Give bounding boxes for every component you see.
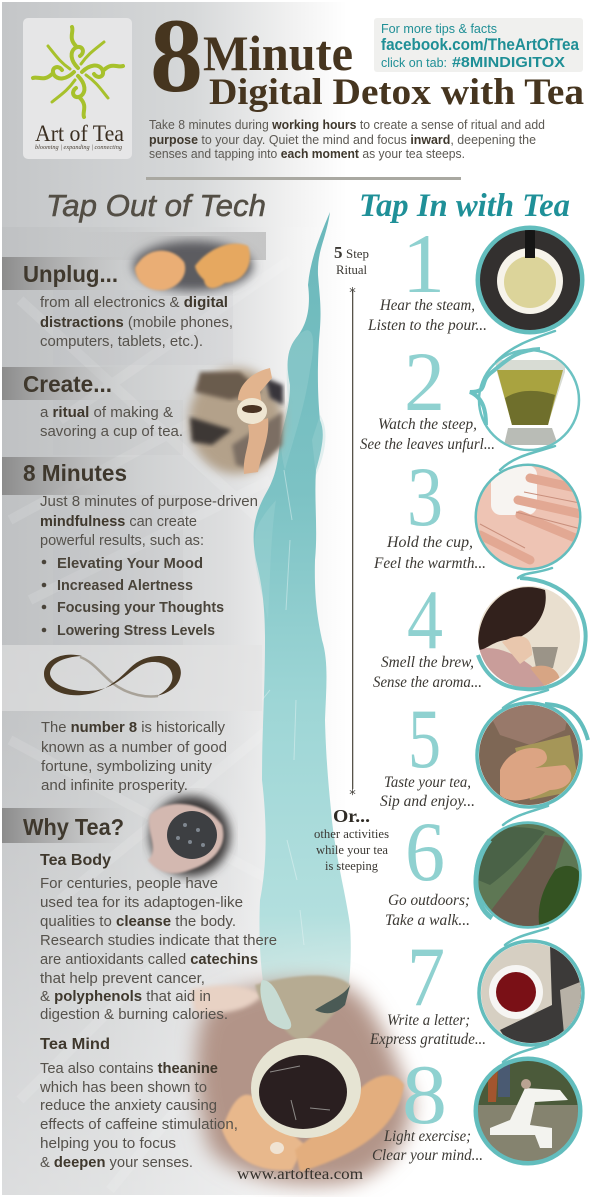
step 8: 8 — [402, 1048, 447, 1142]
step 7: 7 — [407, 930, 445, 1024]
step 7: Write a letter; — [387, 1012, 470, 1029]
subsection: tea mind: which has been shown to — [39, 1079, 207, 1096]
step 4: 4 — [407, 573, 443, 667]
step 6 — [386, 821, 582, 929]
band: unplug — [2, 257, 132, 290]
section: 8 minutes: Just 8 minutes of purpose-driven — [40, 493, 258, 510]
step 1: 1 — [402, 217, 445, 311]
section: unplug: from all electronics & digital — [40, 294, 228, 311]
heading: tap in with tea: Tap In with Tea — [359, 188, 570, 224]
contact callout: #8MINDIGITOX — [452, 54, 565, 71]
band: 8 minutes — [2, 457, 142, 495]
contact callout — [374, 18, 583, 72]
subsection: tea mind: effects of caffeine stimulation, — [40, 1116, 238, 1133]
photo: tai chi — [475, 1058, 581, 1165]
logo tagline: blooming | expanding | connecting — [35, 144, 123, 151]
step 3: 3 — [407, 450, 443, 544]
section: why tea: Why Tea? — [23, 814, 124, 840]
title: Digital Detox with Tea — [209, 72, 584, 113]
step 6: Take a walk... — [385, 912, 470, 929]
intro text: Take 8 minutes during working hours to create a sense of ritual and add — [149, 118, 545, 132]
section: create: Create... — [23, 371, 112, 397]
section: why tea — [23, 814, 277, 968]
heading: tap out of tech: Tap Out of Tech — [46, 188, 266, 223]
text continuation: tea body: & polyphenols that aid in — [40, 988, 211, 1005]
step 5 — [380, 692, 588, 810]
band: why tea — [2, 808, 127, 843]
text: number 8: and infinite prosperity. — [41, 777, 188, 794]
bullet list: Elevating Your Mood — [57, 555, 203, 572]
text continuation: tea body: digestion & burning calories. — [40, 1006, 228, 1023]
section: create: savoring a cup of tea. — [40, 423, 183, 440]
or other activities note: while your tea — [316, 842, 388, 857]
title: Minute — [203, 25, 353, 81]
step 3 — [374, 464, 582, 570]
intro text: senses and tapping into each moment as your tea steeps. — [149, 147, 465, 161]
text continuation: tea body: that help prevent cancer, — [40, 970, 205, 987]
website url: www.artoftea.com — [237, 1166, 363, 1183]
section: unplug: computers, tablets, etc.). — [40, 333, 203, 350]
text: number 8: known as a number of good — [41, 739, 227, 756]
subsection: tea mind: Tea also contains theanine — [40, 1060, 218, 1077]
section: create — [23, 371, 183, 440]
teal ribbon — [254, 212, 351, 1010]
text: number 8 — [41, 719, 227, 794]
intro text: purpose to your day. Quiet the mind and focus inward, deepening the — [149, 133, 536, 147]
subsection: tea mind: Tea Mind — [40, 1036, 110, 1053]
step 2: Watch the steep, — [378, 416, 477, 433]
subsection: tea body: qualities to cleanse the body. — [40, 913, 236, 930]
step 8: Light exercise; — [383, 1128, 471, 1145]
text continuation: tea body — [40, 970, 228, 1023]
step 3: Feel the warmth... — [373, 555, 486, 572]
step 6: Go outdoors; — [388, 892, 470, 909]
step 1: Hear the steam, — [379, 297, 475, 314]
or other activities note: is steeping — [325, 858, 378, 873]
subsection: tea body: are antioxidants called catechins — [40, 951, 258, 968]
photo: unplugging hands — [133, 241, 253, 291]
bullet list — [42, 555, 224, 639]
step 1 — [367, 217, 585, 335]
contact callout: facebook.com/TheArtOfTea — [381, 35, 579, 54]
divider — [146, 177, 461, 180]
contact callout: For more tips & facts — [381, 21, 497, 36]
bullet list: Lowering Stress Levels — [57, 622, 215, 639]
step 5: 5 — [408, 692, 441, 786]
photo: cup on a letter — [478, 940, 585, 1046]
step 4: Sense the aroma... — [373, 674, 482, 691]
step 5: Sip and enjoy... — [380, 793, 475, 810]
ritual timeline: * — [349, 286, 356, 301]
subsection: tea body — [40, 852, 277, 968]
step 6: 6 — [405, 805, 445, 899]
step 3: Hold the cup, — [386, 534, 473, 551]
step 8 — [372, 1048, 581, 1165]
or other activities note: Or... — [333, 806, 370, 826]
step 4: Smell the brew, — [381, 654, 474, 671]
section: 8 minutes: mindfulness can create — [40, 513, 197, 530]
header photo band — [46, 232, 266, 260]
photo: tea field walk — [475, 822, 582, 930]
subsection: tea mind: & deepen your senses. — [40, 1154, 193, 1171]
photo: tea leaves in hands — [148, 796, 230, 876]
band: create — [2, 367, 127, 400]
photo: hands with cup — [189, 368, 283, 474]
step 1: Listen to the pour... — [367, 317, 487, 334]
step 2: 2 — [404, 335, 445, 429]
photo: pouring tea — [475, 225, 585, 335]
subsection: tea body: For centuries, people have — [40, 875, 218, 892]
subsection: tea mind: reduce the anxiety causing — [40, 1097, 217, 1114]
step 5: Taste your tea, — [384, 774, 471, 791]
text: number 8: fortune, symbolizing unity — [41, 758, 213, 775]
subsection: tea body: Tea Body — [40, 852, 111, 869]
photo: hands holding cup — [475, 463, 585, 571]
photo: smelling the cup — [470, 578, 586, 690]
section: 8 minutes: powerful results, such as: — [40, 532, 204, 549]
step 4 — [373, 573, 586, 691]
connectors between circles — [496, 331, 555, 1062]
or other activities note — [314, 806, 389, 873]
ritual timeline: * — [349, 788, 356, 803]
bullet list: Focusing your Thoughts — [57, 599, 224, 616]
step 7 — [369, 930, 585, 1048]
section: 8 minutes — [23, 460, 258, 639]
band: infinity block — [2, 645, 262, 711]
title — [150, 0, 584, 114]
section: create: a ritual of making & — [40, 404, 173, 421]
intro text — [149, 118, 545, 161]
subsection: tea mind: helping you to focus — [40, 1135, 176, 1152]
logo panel — [23, 18, 132, 159]
logo mark — [33, 27, 123, 117]
photo: sipping tea — [477, 703, 588, 807]
section: 8 minutes: 8 Minutes — [23, 460, 127, 486]
step 2 — [360, 335, 579, 453]
logo wordmark: Art of Tea — [35, 121, 124, 146]
ritual timeline: 5 — [334, 243, 342, 262]
step 8: Clear your mind... — [372, 1147, 483, 1164]
or other activities note: other activities — [314, 826, 389, 841]
subsection: tea mind — [39, 1036, 238, 1171]
section: unplug: Unplug... — [23, 261, 118, 287]
ritual timeline — [334, 243, 369, 803]
ritual timeline: Step — [346, 246, 369, 261]
text: number 8: The number 8 is historically — [41, 719, 225, 736]
title: 8 — [150, 0, 203, 114]
subsection: tea body: used tea for its adaptogen-like — [40, 894, 243, 911]
contact callout: click on tab: — [381, 55, 447, 70]
step 2: See the leaves unfurl... — [360, 436, 495, 453]
ritual timeline: Ritual — [336, 262, 367, 277]
icon: infinity — [44, 655, 181, 697]
bullet list: Increased Alertness — [57, 577, 193, 594]
step 7: Express gratitude... — [369, 1031, 486, 1048]
section: unplug — [23, 261, 233, 350]
photo: glass steeper — [470, 349, 579, 450]
subsection: tea body: Research studies indicate that there — [40, 932, 277, 949]
photo: cup and face — [190, 976, 412, 1185]
section: unplug: distractions (mobile phones, — [40, 314, 233, 331]
